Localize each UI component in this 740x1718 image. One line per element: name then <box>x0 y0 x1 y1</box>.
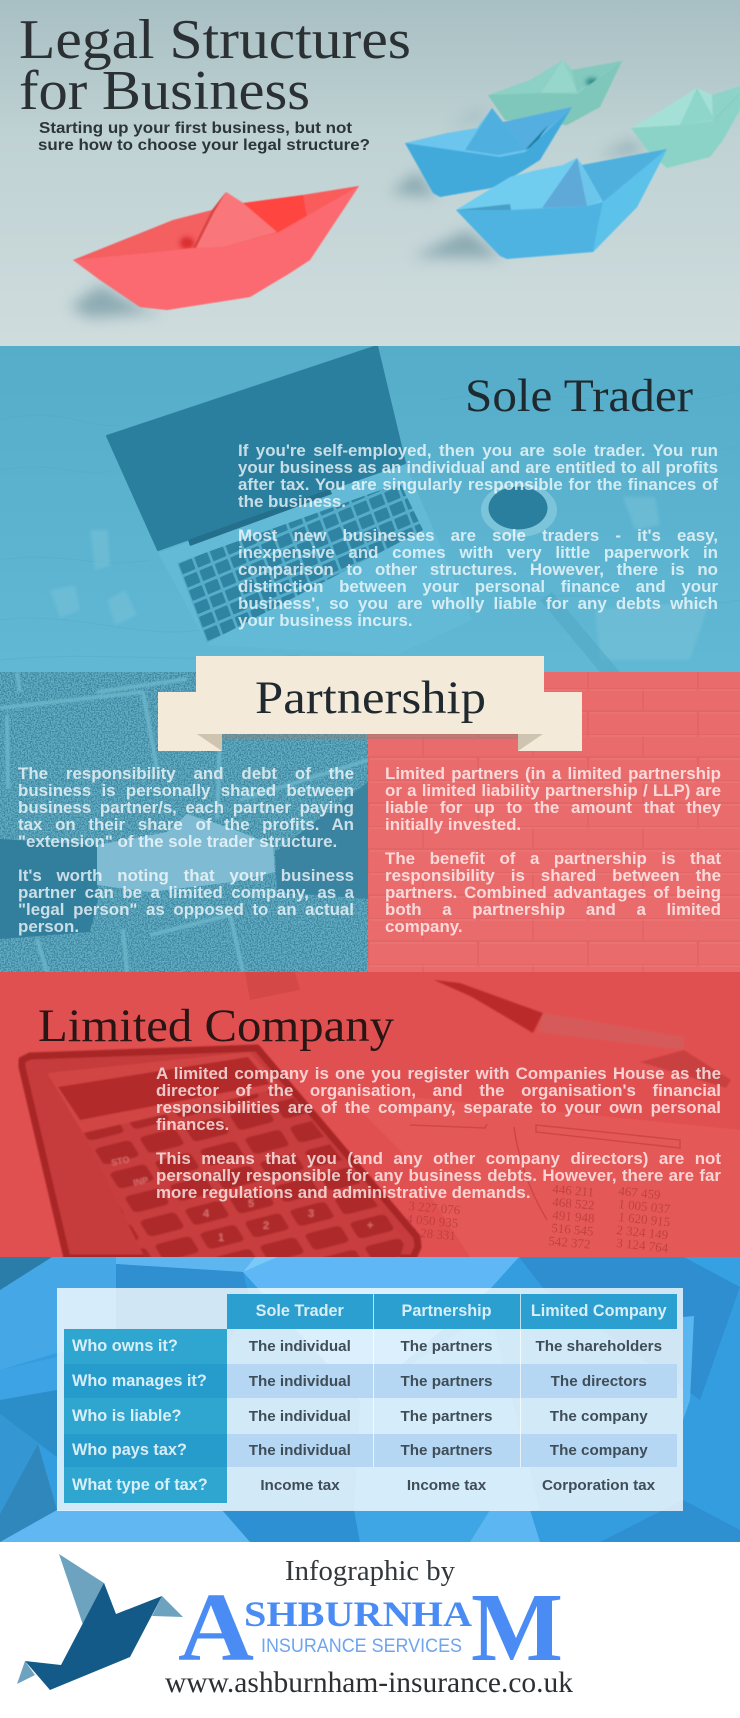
comparison table: Who pays tax? <box>72 1441 187 1459</box>
heading: Limited Company <box>38 1000 395 1052</box>
icon: calculator: + <box>367 1220 373 1232</box>
icon: green boat right <box>631 86 740 168</box>
comparison table: The individual <box>249 1372 351 1390</box>
comparison table: Who manages it? <box>72 1372 207 1390</box>
comparison table: The partners <box>400 1442 492 1459</box>
company logo wordmark: A <box>178 1574 254 1682</box>
company logo wordmark: M <box>471 1574 563 1682</box>
icon: calculator: 2 <box>263 1220 269 1232</box>
icon: blue boat front <box>456 149 667 259</box>
panel: hero with paper boats <box>0 0 740 346</box>
text block: after tax. You are singularly responsible for the finances of <box>238 475 718 494</box>
photo: paper with figures: 2 324 149 <box>616 1222 669 1242</box>
left text block: business partner/s, each partner paying <box>18 798 354 817</box>
comparison table: The company <box>550 1442 648 1459</box>
right text block: company. <box>385 917 463 936</box>
left text block: "extension" of the sole trader structure. <box>18 832 337 851</box>
text block: director of the organisation, and the organisation's financial <box>156 1081 721 1100</box>
photo: paper with figures: 468 522 <box>552 1194 595 1213</box>
text block: This means that you (and any other company directors) are not <box>156 1149 721 1168</box>
photo: paper with figures: 467 459 <box>618 1183 661 1202</box>
text block: If you're self-employed, then you are sole trader. You run <box>238 441 718 460</box>
comparison table: The partners <box>400 1408 492 1424</box>
comparison table: Income tax <box>407 1476 486 1494</box>
comparison table: Income tax <box>260 1476 340 1494</box>
photo: paper with figures <box>340 1090 740 1257</box>
comparison table: Limited Company <box>531 1302 667 1320</box>
panel: footer <box>0 1542 740 1718</box>
right text block: or a limited liability partnership / LLP) are <box>385 781 721 800</box>
comparison table: The partners <box>400 1372 492 1390</box>
panel: comparison table on low-poly background <box>0 1257 740 1542</box>
heading: Sole Trader <box>465 370 693 422</box>
text block: comparison to other structures. However, there is no <box>238 560 718 579</box>
icon: calculator: STO <box>110 1154 130 1168</box>
icon: calculator: 1 <box>218 1232 224 1244</box>
text block: more regulations and administrative demands. <box>156 1183 531 1202</box>
right text block <box>385 764 721 936</box>
photo: paper with figures: 491 948 <box>552 1207 595 1226</box>
text block <box>238 441 718 630</box>
text block: distinction between your personal finance and your <box>238 577 718 596</box>
icon: pen <box>434 980 731 1088</box>
right text block: Limited partners (in a limited partnership <box>385 764 721 783</box>
right text block: The benefit of a partnership is that <box>385 849 721 868</box>
company logo wordmark <box>178 1574 563 1682</box>
title: for Business <box>19 60 310 122</box>
comparison table: What type of tax? <box>72 1476 208 1494</box>
text block: Most new businesses are sole traders - it's easy, <box>238 526 718 545</box>
heading: Partnership <box>255 672 486 724</box>
photo: paper with figures: 3 124 764 <box>616 1235 669 1255</box>
title: Legal Structures <box>19 9 411 71</box>
ribbon banner <box>158 656 582 751</box>
comparison table: The company <box>550 1408 648 1424</box>
subtitle: Starting up your first business, but not <box>39 120 353 137</box>
table backing panel <box>57 1288 683 1511</box>
left text block: "legal person" as opposed to an actual <box>18 900 354 919</box>
icon: origami bird logo <box>17 1554 183 1690</box>
text block: business', so you are wholly liable for any debts which <box>238 594 718 613</box>
photo: handshake on stone <box>0 672 368 972</box>
photo: brick wall <box>368 672 740 972</box>
icon: green boat back <box>488 60 622 125</box>
icon: calculator: 3 <box>308 1208 314 1220</box>
left text block: partner can be a limited company, as a <box>18 883 354 902</box>
photo: paper with figures: R 28 331 <box>408 1224 457 1243</box>
right text block: both a partnership and a limited <box>385 900 721 919</box>
icon: laptop <box>107 346 472 655</box>
right text block: responsibility is shared between the <box>385 866 721 885</box>
comparison table: The shareholders <box>535 1338 662 1355</box>
credit line: Infographic by <box>285 1556 455 1587</box>
company logo wordmark: SHBURNHA <box>244 1594 472 1634</box>
left text block: person. <box>18 917 79 936</box>
left text block: The responsibility and debt of the <box>18 764 354 783</box>
subtitle <box>38 120 370 154</box>
photo: paper with figures: 4 050 935 <box>406 1211 459 1231</box>
icon: calculator: 4 <box>203 1208 210 1220</box>
right text block: initially invested. <box>385 815 521 834</box>
text block: A limited company is one you register with Companies House as the <box>156 1064 721 1083</box>
icon: calculator: INP <box>132 1175 149 1188</box>
icon: red boat <box>73 186 359 310</box>
comparison table: The directors <box>551 1372 647 1390</box>
subtitle: sure how to choose your legal structure? <box>38 137 370 154</box>
comparison table: The individual <box>249 1408 351 1424</box>
comparison table: The individual <box>249 1442 351 1459</box>
comparison table: Who is liable? <box>72 1406 181 1424</box>
left text block <box>18 764 354 936</box>
comparison table: The individual <box>249 1338 351 1355</box>
photo: paper with figures: 3 227 076 <box>408 1198 461 1218</box>
panel: sole trader <box>0 346 740 672</box>
right text block: partners. Combined advantages of being <box>385 883 721 902</box>
left text block: business is personally shared between <box>18 781 354 800</box>
panel: limited company <box>0 972 740 1257</box>
icon: blue boat middle <box>405 107 572 197</box>
comparison table: Corporation tax <box>542 1476 655 1494</box>
text block: responsibilities are of the company, separate to your own personal <box>156 1098 721 1117</box>
website url: www.ashburnham-insurance.co.uk <box>165 1666 573 1699</box>
photo: paper with figures: 1 005 037 <box>618 1196 671 1216</box>
left text block: tax on their share of the profits. An <box>18 815 354 834</box>
right text block: liable for up to the amount that they <box>385 798 721 817</box>
comparison table: The partners <box>400 1338 492 1355</box>
photo: paper with figures: 516 545 <box>551 1220 594 1239</box>
comparison table: Who owns it? <box>72 1337 178 1355</box>
text block: your business as an individual and are entitled to all profits <box>238 458 718 477</box>
photo: paper with figures: 542 372 <box>548 1233 591 1252</box>
comparison table: Partnership <box>402 1302 491 1320</box>
text block <box>156 1064 721 1202</box>
text block: the business. <box>238 492 346 511</box>
text block: finances. <box>156 1115 229 1134</box>
panel: partnership <box>0 656 740 972</box>
icon: calculator: 5 <box>248 1198 254 1210</box>
text block: your business incurs. <box>238 611 413 630</box>
text block: personally responsible for any business debts. However, there are far <box>156 1166 721 1185</box>
title <box>19 9 411 122</box>
icon: calculator <box>22 1048 418 1258</box>
icon: coffee cup <box>481 483 557 537</box>
text block: inexpensive and comes with very little paperwork in <box>238 543 718 562</box>
left text block: It's worth noting that your business <box>18 866 354 885</box>
comparison table <box>64 1294 677 1503</box>
comparison table: Sole Trader <box>256 1302 344 1320</box>
photo: paper with figures: 1 620 915 <box>618 1209 671 1229</box>
photo: paper with figures: 446 211 <box>552 1181 595 1200</box>
company logo wordmark: INSURANCE SERVICES <box>261 1636 462 1657</box>
